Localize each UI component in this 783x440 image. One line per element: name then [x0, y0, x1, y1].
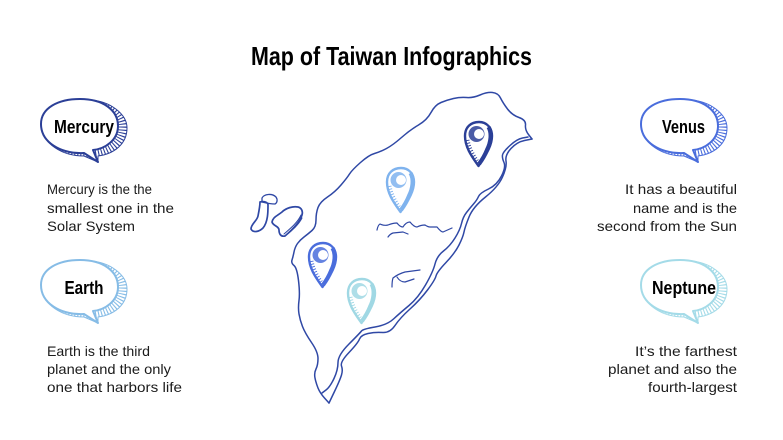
panel: Mercury — [41, 99, 174, 234]
text: Venus description: It has a beautiful — [625, 181, 737, 197]
west and north coast — [292, 92, 532, 403]
speech bubble: Neptune — [641, 260, 727, 323]
river line south — [392, 270, 420, 287]
map pin: pale teal — [348, 279, 375, 323]
text: Mercury description: smallest one in the — [47, 200, 174, 216]
panel: Neptune — [608, 260, 737, 395]
mountain ridge line north — [377, 222, 452, 232]
infographic canvas — [40, 46, 737, 404]
map pin: sky blue — [387, 168, 414, 212]
map of Taiwan — [251, 92, 532, 403]
map pin: royal blue — [309, 243, 336, 287]
east coast seaward line — [329, 139, 532, 403]
text: Neptune description: planet and also the — [608, 361, 737, 377]
text: Earth description: one that harbors life — [47, 379, 182, 395]
panel: Earth — [41, 260, 182, 395]
text: Earth description: planet and the only — [47, 361, 171, 377]
river line south lower — [397, 277, 414, 282]
text: Venus description: name and is the — [633, 200, 737, 216]
text: Mercury description: Mercury is the the — [47, 181, 152, 197]
heading: Venus: Venus — [662, 117, 705, 137]
text: Mercury description: Solar System — [47, 218, 135, 234]
heading: Mercury: Mercury — [54, 117, 114, 137]
small offshore islet — [262, 194, 277, 204]
speech bubble: Mercury — [41, 99, 127, 162]
speech bubble: Venus — [641, 99, 727, 162]
mountain ridge line north lower — [388, 232, 408, 237]
small offshore island — [251, 202, 268, 232]
text: Neptune description: fourth-largest — [648, 379, 737, 395]
map pin: dark blue — [465, 122, 492, 166]
text: Earth description: Earth is the third — [47, 343, 150, 359]
heading: Neptune: Neptune — [652, 278, 716, 298]
offshore island inner line — [284, 215, 302, 235]
heading: Earth: Earth — [64, 278, 104, 298]
text: Neptune description: It’s the farthest — [635, 343, 737, 359]
title: Map of Taiwan Infographics — [251, 41, 532, 71]
speech bubble: Earth — [41, 260, 127, 323]
panel: Venus — [597, 99, 737, 234]
east coast landward line — [322, 137, 528, 393]
large offshore island — [272, 207, 302, 236]
text: Venus description: second from the Sun — [597, 218, 737, 234]
